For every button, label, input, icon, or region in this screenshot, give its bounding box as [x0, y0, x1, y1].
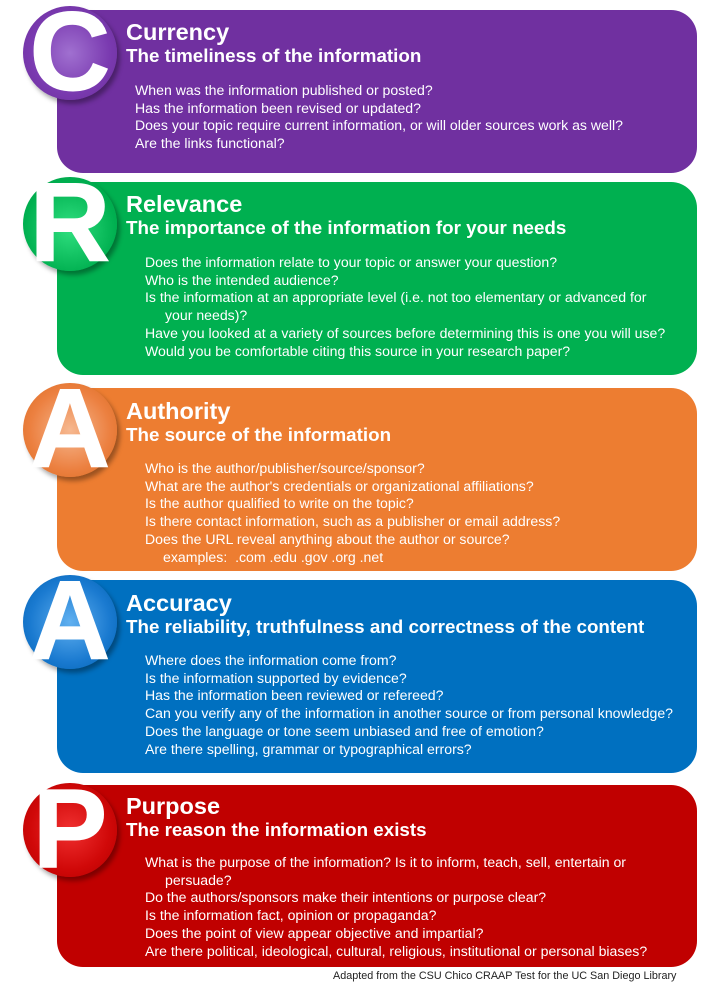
icon: letter R: R [30, 160, 110, 285]
text: purpose questions: Is the information fact, opinion or propaganda? [145, 907, 436, 923]
icon: letter A [23, 383, 117, 477]
text: purpose questions [145, 854, 647, 959]
text: currency questions: Has the information been revised or updated? [135, 100, 421, 116]
panel: relevance [57, 182, 697, 375]
panel: currency [57, 10, 697, 173]
heading: authority: Authority [126, 398, 230, 424]
panel: authority [57, 388, 697, 571]
text: authority questions: Is there contact information, such as a publisher or email address? [145, 513, 560, 529]
text: authority questions: What are the author's credentials or organizational affiliations? [145, 478, 534, 494]
panel: accuracy [57, 580, 697, 773]
text: purpose questions: Are there political, ideological, cultural, religious, institutional or personal biases? [145, 943, 647, 959]
text: relevance questions: Is the information at an appropriate level (i.e. not too elementary or advanced for your needs)? [145, 289, 646, 323]
subheading: relevance: The importance of the information for your needs [126, 217, 566, 238]
heading: purpose: Purpose [126, 793, 220, 819]
heading: accuracy: Accuracy [126, 590, 232, 616]
text: relevance questions [145, 254, 665, 359]
text: purpose questions: Do the authors/sponsors make their intentions or purpose clear? [145, 889, 546, 905]
text: accuracy questions: Does the language or tone seem unbiased and free of emotion? [145, 723, 544, 739]
icon: letter A: A [30, 558, 110, 683]
subheading: purpose: The reason the information exists [126, 819, 427, 840]
text: purpose questions: Does the point of view appear objective and impartial? [145, 925, 483, 941]
text: authority questions: Who is the author/publisher/source/sponsor? [145, 460, 425, 476]
text: accuracy questions: Where does the information come from? [145, 652, 396, 668]
text: authority questions: examples: .com .edu .gov .org .net [163, 549, 383, 565]
text: accuracy questions: Can you verify any of the information in another source or from personal knowledge? [145, 705, 673, 721]
text: authority questions [145, 460, 560, 565]
text: relevance questions: Does the information relate to your topic or answer your question? [145, 254, 557, 270]
text: relevance questions: Have you looked at a variety of sources before determining this is one you will use? [145, 325, 665, 341]
text: currency questions [135, 82, 623, 151]
subheading: accuracy: The reliability, truthfulness and correctness of the content [126, 616, 644, 637]
text: currency questions: When was the information published or posted? [135, 82, 433, 98]
text: relevance questions: Would you be comfortable citing this source in your research paper? [145, 343, 570, 359]
text: relevance questions: Who is the intended audience? [145, 272, 339, 288]
icon: letter A [23, 575, 117, 669]
icon: letter P [23, 783, 117, 877]
icon: letter R [23, 177, 117, 271]
text: currency questions: Are the links functional? [135, 135, 285, 151]
text: accuracy questions [145, 652, 673, 757]
heading: relevance: Relevance [126, 191, 242, 217]
panel: purpose [57, 785, 697, 967]
icon: letter P: P [33, 766, 107, 891]
text: accuracy questions: Is the information supported by evidence? [145, 670, 407, 686]
text: accuracy questions: Are there spelling, grammar or typographical errors? [145, 741, 472, 757]
text: accuracy questions: Has the information been reviewed or refereed? [145, 687, 444, 703]
footer credit: Adapted from the CSU Chico CRAAP Test for the UC San Diego Library [333, 970, 676, 982]
heading: currency: Currency [126, 19, 229, 45]
text: authority questions: Is the author qualified to write on the topic? [145, 495, 414, 511]
icon: letter A: A [30, 366, 110, 491]
subheading: authority: The source of the information [126, 424, 391, 445]
subheading: currency: The timeliness of the information [126, 45, 421, 66]
text: authority questions: Does the URL reveal anything about the author or source? [145, 531, 510, 547]
text: currency questions: Does your topic require current information, or will older sources work as well? [135, 117, 623, 133]
text: purpose questions: What is the purpose of the information? Is it to inform, teach, sell, entertain or persuade? [145, 854, 626, 888]
